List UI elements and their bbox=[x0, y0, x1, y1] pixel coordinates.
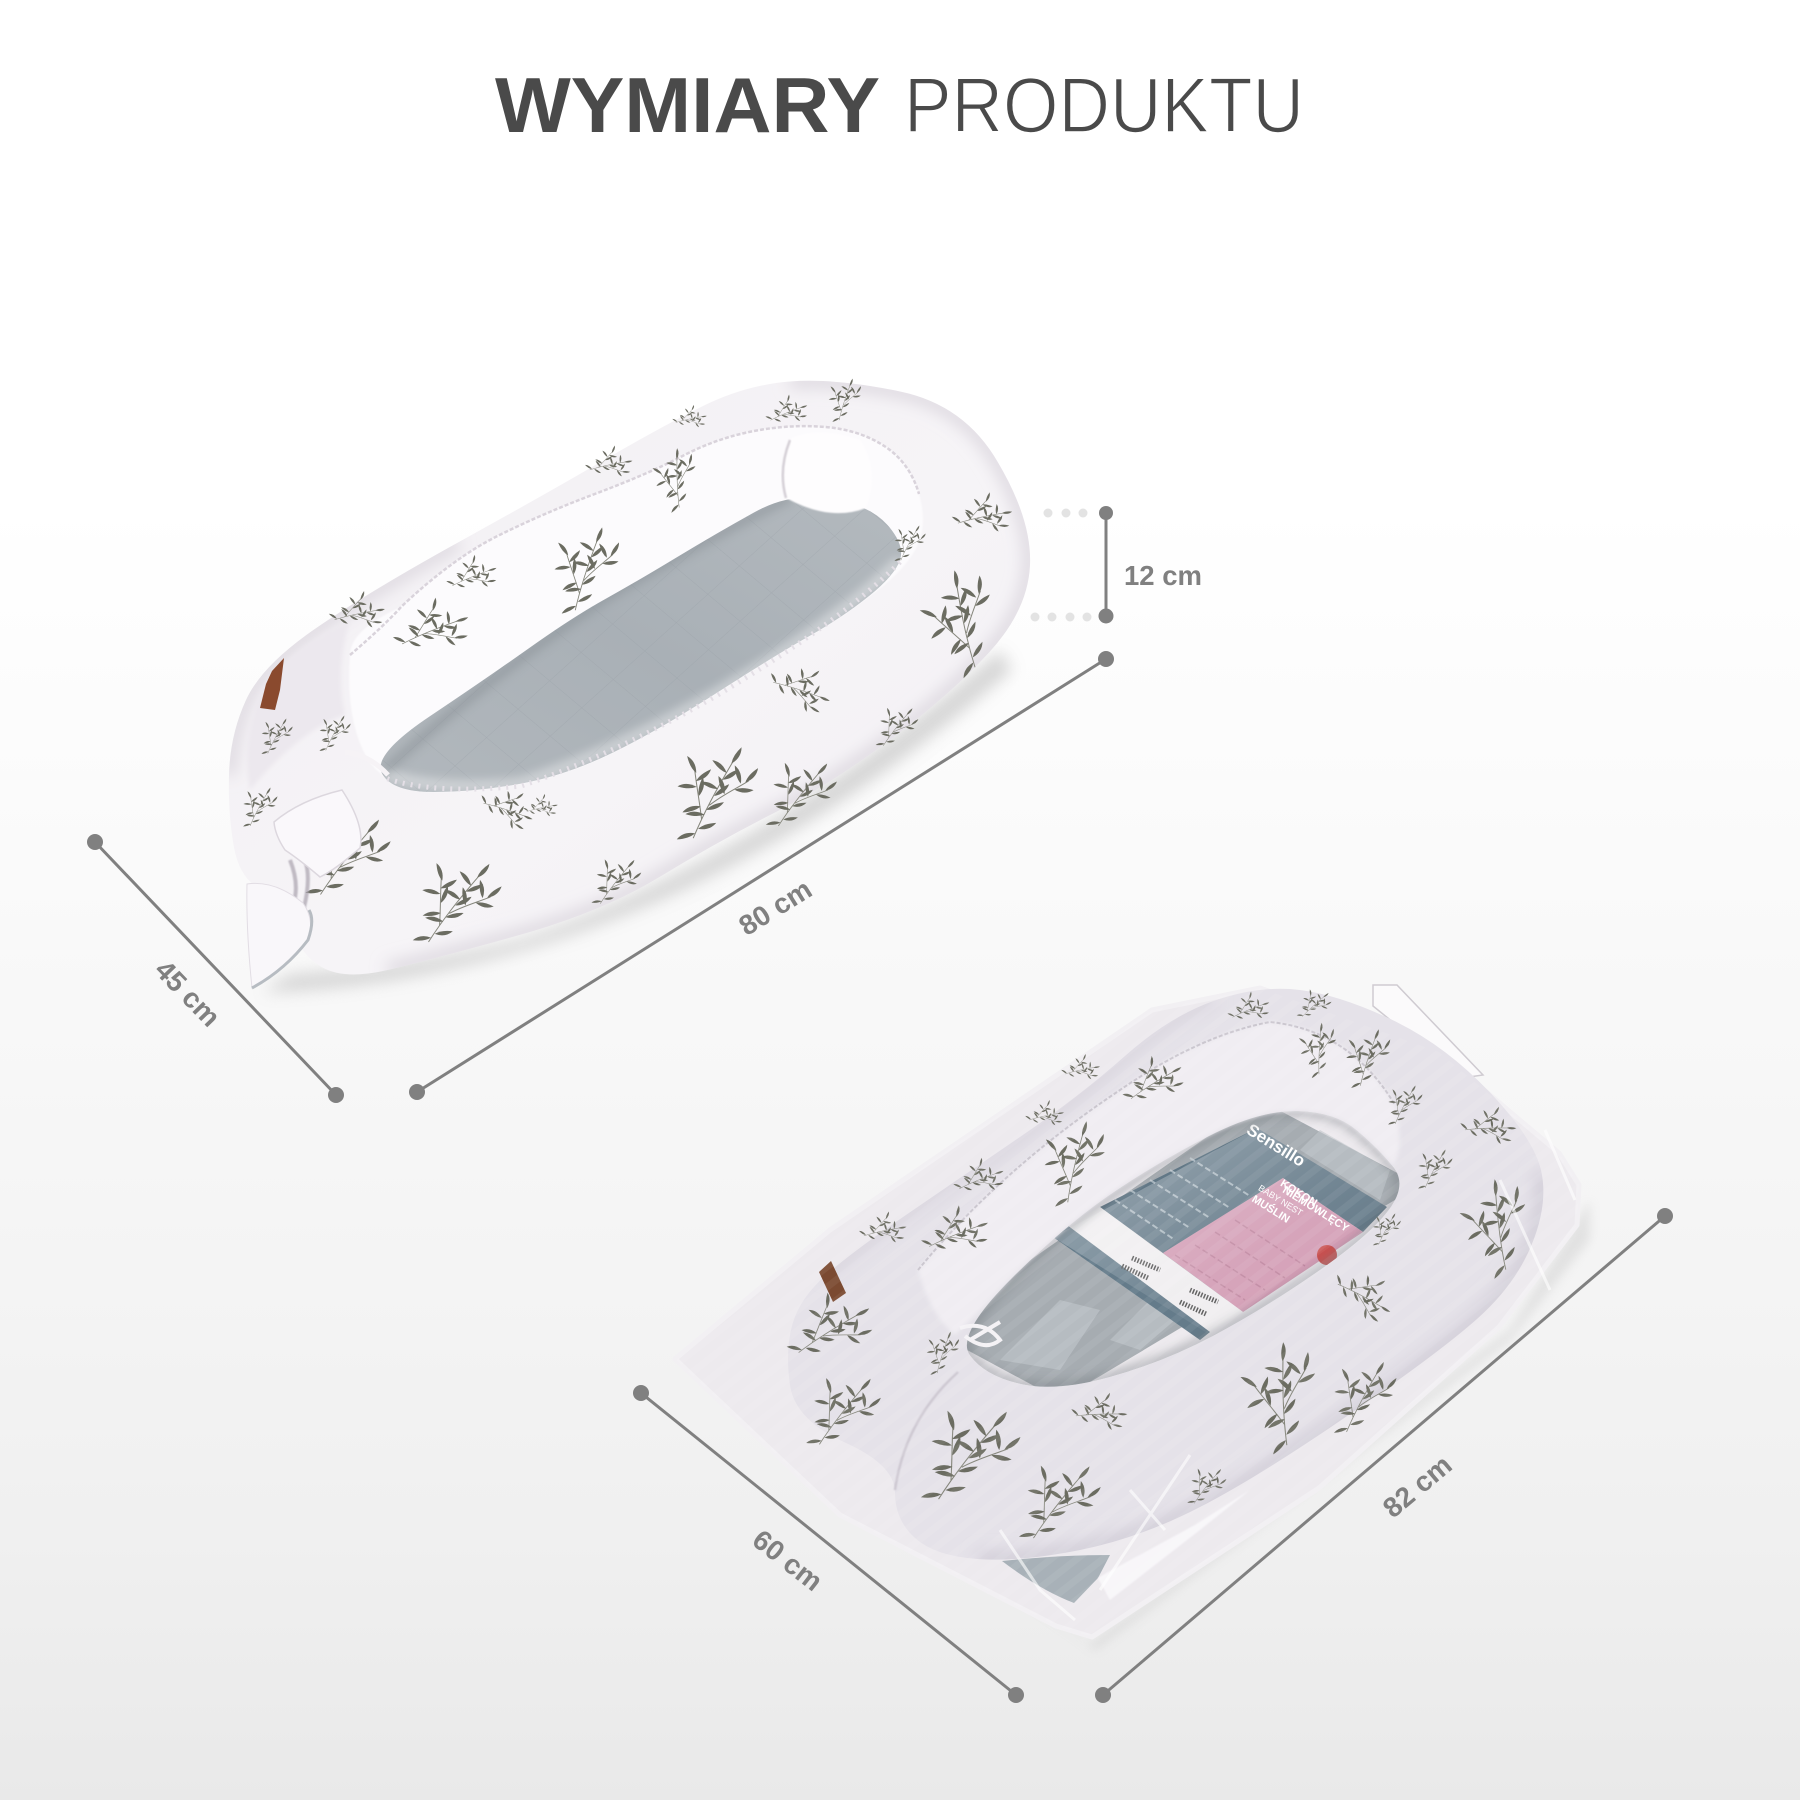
leather tag bbox=[260, 658, 284, 710]
measure line bbox=[409, 651, 1114, 1100]
measure line bbox=[1098, 506, 1114, 624]
rim seam bbox=[918, 1022, 1395, 1270]
bow lobe crease bbox=[895, 1372, 958, 1490]
rim seam bbox=[350, 426, 919, 655]
label pink panel bbox=[1163, 1178, 1363, 1312]
roll end pillow bbox=[781, 432, 872, 513]
label white band bbox=[1074, 1207, 1243, 1320]
bag handle bbox=[1373, 985, 1483, 1078]
heart bow large bbox=[274, 790, 361, 877]
title bbox=[495, 61, 1304, 149]
label heading: MUŚLIN bbox=[1250, 1192, 1292, 1226]
label: 12 cm bbox=[1124, 560, 1202, 591]
product: baby nest cocoon bbox=[229, 375, 1030, 992]
cocoon shadow bbox=[262, 650, 1012, 992]
drawstring bbox=[960, 1322, 1000, 1345]
dimension: height 12 cm bbox=[1030, 506, 1202, 624]
measure line bbox=[1095, 1208, 1673, 1703]
front rim gathers bbox=[385, 562, 900, 789]
roll crease bbox=[783, 440, 790, 498]
measure line bbox=[87, 834, 344, 1103]
blanket corner bbox=[1002, 1555, 1110, 1603]
guide dots top bbox=[1044, 508, 1088, 518]
heart bow tip bbox=[247, 883, 312, 988]
dimension: width 45 cm bbox=[87, 834, 344, 1103]
rear-left end shading bbox=[247, 620, 350, 790]
folded fabric bbox=[1098, 1490, 1250, 1600]
label heading: KOKON bbox=[1278, 1178, 1319, 1209]
dimension: length 80 cm bbox=[409, 651, 1114, 1100]
brand logo: Sensillo bbox=[1243, 1120, 1309, 1171]
plastic highlights bbox=[1000, 1130, 1575, 1620]
label: 80 cm bbox=[733, 873, 817, 942]
floor folds bbox=[1000, 1130, 1390, 1370]
product: packed in plastic bag bbox=[675, 982, 1590, 1650]
body volume shading bbox=[229, 381, 1030, 970]
guide dots bottom bbox=[1030, 612, 1092, 622]
dimension: package length 82 cm bbox=[1095, 1208, 1673, 1703]
inner roll bbox=[918, 1022, 1400, 1335]
bag shadow bbox=[690, 1200, 1590, 1650]
label heading: NIEMOWLĘCY bbox=[1280, 1184, 1351, 1235]
floral print bbox=[236, 375, 1017, 968]
label heading: BABY NEST bbox=[1257, 1183, 1305, 1218]
barcodes bbox=[1122, 1258, 1218, 1314]
inner wall bbox=[349, 426, 923, 792]
floral print bbox=[777, 982, 1544, 1562]
plastic bag bbox=[675, 988, 1579, 1637]
cocoon ring bbox=[788, 989, 1543, 1560]
label blue panel bbox=[1100, 1128, 1387, 1253]
pink copy lines bbox=[1175, 1220, 1305, 1300]
label: 45 cm bbox=[149, 954, 226, 1033]
package label bbox=[1053, 1120, 1387, 1340]
title: WYMIARY bbox=[495, 61, 880, 149]
cocoon body bbox=[229, 381, 1030, 974]
title: PRODUKTU bbox=[904, 61, 1304, 149]
label heading bbox=[1252, 1179, 1350, 1231]
ring volume shading bbox=[978, 1026, 1544, 1560]
drawstring bbox=[320, 752, 388, 880]
leather tag bbox=[819, 1261, 846, 1302]
label: 82 cm bbox=[1377, 1449, 1458, 1524]
label blue strip bbox=[1053, 1225, 1210, 1340]
label copy lines bbox=[1115, 1158, 1250, 1240]
hole inner shadow bbox=[967, 1111, 1399, 1387]
nest floor bbox=[930, 1100, 1420, 1400]
bow creases bbox=[290, 860, 308, 915]
label: 60 cm bbox=[747, 1524, 829, 1597]
quilted floor bbox=[381, 497, 901, 792]
measure line bbox=[633, 1385, 1024, 1703]
plastic stripes bbox=[675, 988, 1579, 1637]
red badge bbox=[1317, 1245, 1337, 1265]
dimension: package width 60 cm bbox=[633, 1385, 1024, 1703]
label haze bbox=[1053, 1128, 1387, 1333]
